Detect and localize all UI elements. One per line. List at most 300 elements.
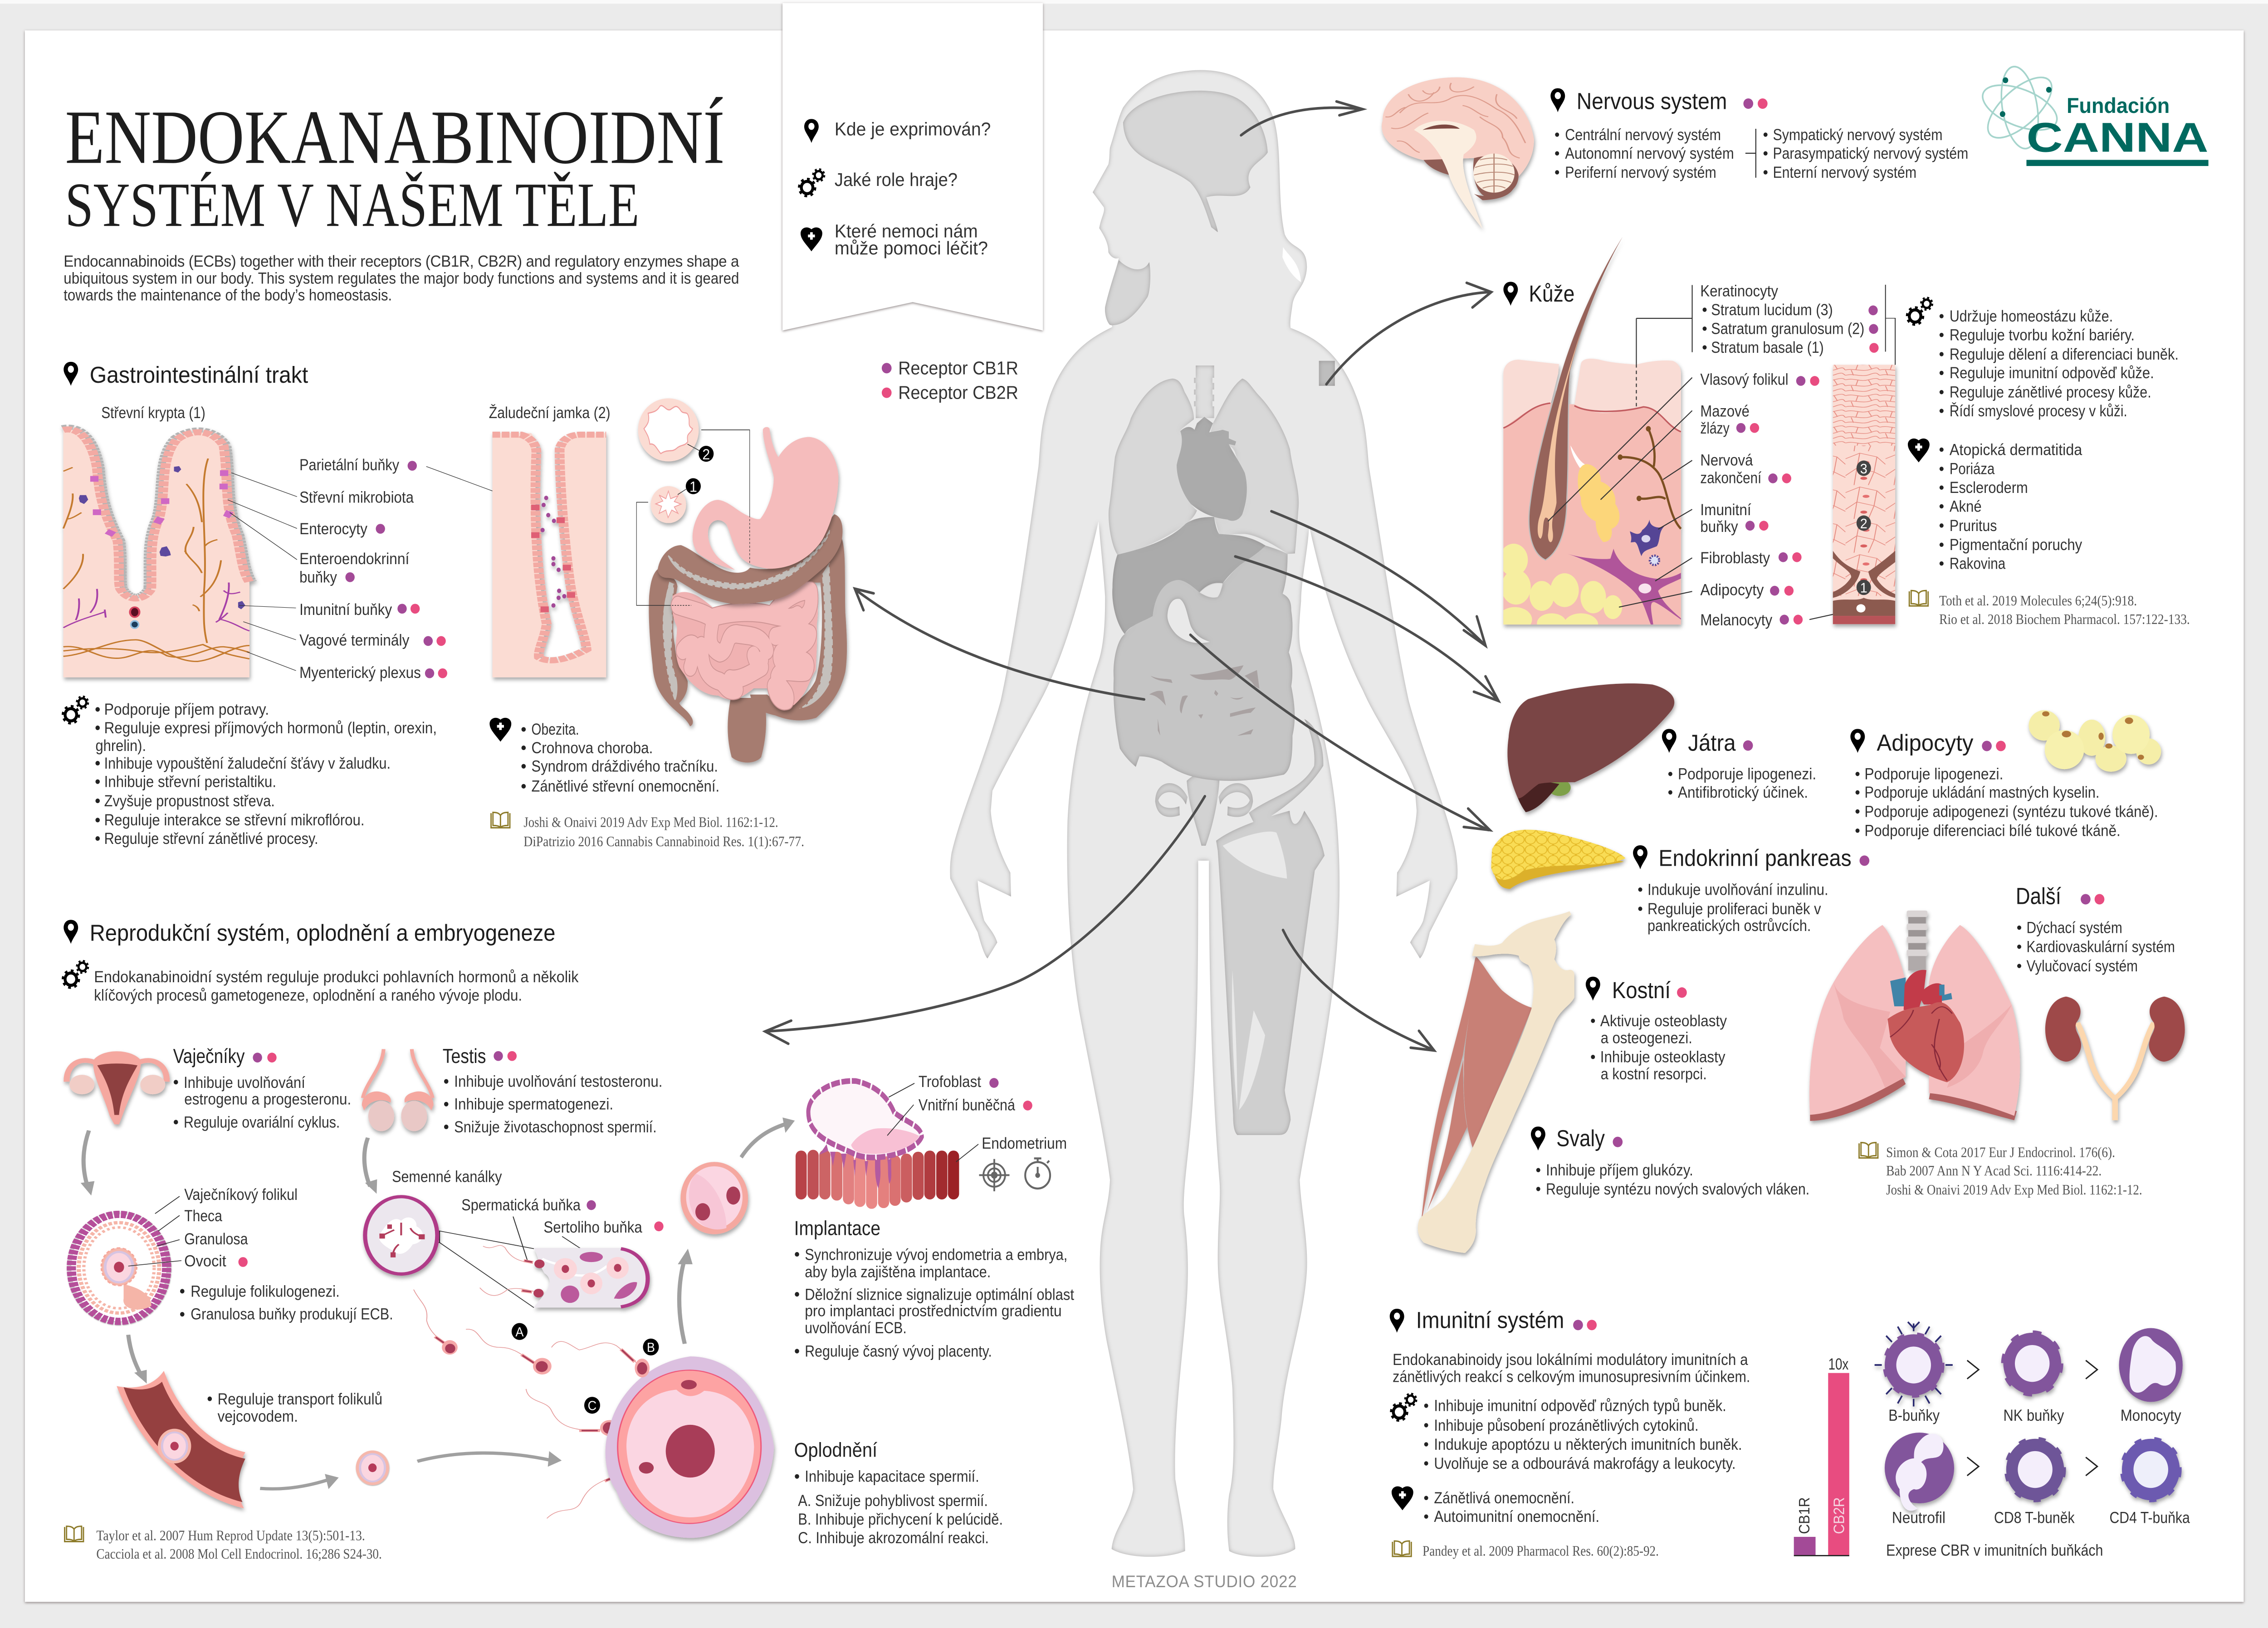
list: skin functions: Reguluje tvorbu kožní bariéry.: [1950, 327, 2135, 344]
legend: receptors: Receptor CB1R: [898, 358, 1018, 379]
organ: skin square: [1319, 361, 1335, 386]
arrows: gray process flow: [81, 1131, 693, 1489]
organ: pelvis and femur: [1216, 811, 1325, 1135]
arrows: body organs to panels: [765, 102, 1499, 1051]
icon: location pin: [804, 119, 819, 143]
main title: SYSTÉM V NAŠEM TĚLE: [65, 171, 639, 240]
list: immune functions: [1424, 1397, 1742, 1472]
panel: adipocytes: [1850, 710, 2161, 840]
implantation text: Reguluje časný vývoj placenty.: [805, 1342, 992, 1360]
icon: pin: [64, 920, 78, 944]
logo atom: [1977, 63, 2063, 151]
testes text: [443, 1045, 662, 1136]
list: GI diseases: Syndrom dráždivého tračníku.: [532, 758, 718, 775]
heading: Reprodukční systém, oplodnění a embryogeneze: [90, 920, 555, 946]
list: bone: Inhibuje osteoklasty: [1600, 1048, 1725, 1066]
organ: ovary tubes: [1157, 788, 1251, 813]
references: GI: Joshi & Onaivi 2019 Adv Exp Med Biol. 1162:1-12.: [523, 814, 778, 830]
organ: right lung: [1211, 379, 1299, 554]
list: liver: Podporuje lipogenezi.: [1678, 765, 1816, 783]
list: nervous systems: [1555, 126, 1968, 181]
heading: bone: Kostní: [1612, 978, 1671, 1003]
follicle labels: Reguluje folikulogenezi.: [191, 1283, 340, 1301]
crypt labels: [299, 456, 447, 682]
follicle labels: Vaječníkový folikul: [184, 1186, 298, 1204]
label: seminiferous tubules: Semenné kanálky: [392, 1168, 502, 1186]
bar chart: CB1R vs CB2R: CB1R: [1796, 1497, 1813, 1534]
illustration: small intestine: [672, 582, 818, 707]
arrow: to liver: [1271, 511, 1486, 646]
panel: endocrine pancreas: [1491, 830, 1869, 935]
cell labels: NK buňky: [2003, 1407, 2064, 1424]
intro paragraph: towards the maintenance of the body’s homeostasis.: [64, 287, 392, 304]
skin labels: Stratum basale (1): [1711, 339, 1824, 356]
list: GI functions: Podporuje příjem potravy.: [104, 701, 269, 718]
crypt labels: buňky: [299, 569, 337, 586]
cell labels: Neutrofil: [1892, 1509, 1945, 1527]
gears icon: GI roles: [63, 697, 88, 723]
intro paragraph: [64, 253, 739, 304]
ovaries text: Vaječníky: [173, 1045, 245, 1067]
arrow: to pancreas: [1190, 635, 1490, 830]
list: GI diseases: [522, 721, 719, 795]
leader lines: follicle: [128, 1196, 591, 1308]
skin labels: žlázy: [1700, 419, 1730, 437]
book icon: GI references: [491, 812, 510, 828]
list: skin functions: [1940, 307, 2179, 420]
human body silhouette: [950, 70, 1457, 1591]
list: GI functions: Inhibuje vypouštění žaludeční šťávy v žaludku.: [104, 755, 391, 772]
fertilisation text: A. Snižuje pohyblivost spermií.: [798, 1492, 988, 1510]
illustration: gastric pit: [493, 433, 606, 678]
icon: pin: [1390, 1309, 1404, 1333]
heading: Kůže: [1529, 281, 1574, 307]
heading: Gastrointestinální trakt: [90, 362, 308, 388]
logo: Fundación CANNA: [1977, 63, 2209, 166]
list: pancreas: Reguluje proliferaci buněk v: [1647, 900, 1821, 918]
ovaries text: Inhibuje uvolňování: [184, 1074, 305, 1092]
heading: Nervous system: [1577, 88, 1727, 114]
bar chart: CB1R vs CB2R: CB2R: [1831, 1497, 1848, 1534]
list: skin diseases: Rakovina: [1950, 555, 2006, 573]
illustration: fallopian tube: [117, 1371, 245, 1508]
intro text: [94, 968, 579, 1004]
intro text: zánětlivých reakcí s celkovým imunosupresivním účinkem.: [1393, 1368, 1750, 1386]
organ: uterus: [1187, 773, 1219, 846]
testes text: Inhibuje uvolňování testosteronu.: [454, 1073, 662, 1091]
list: skin diseases: Escleroderm: [1950, 479, 2028, 497]
list: nervous systems: Centrální nervový systém: [1565, 126, 1721, 144]
organ detail: gallbladder gap: [1199, 583, 1223, 598]
arrow: to reproductive: [765, 796, 1205, 1044]
list: bone: a osteogenezi.: [1601, 1029, 1692, 1047]
panel: liver: [1507, 683, 1816, 812]
references: GI: DiPatrizio 2016 Cannabis Cannabinoid Res. 1(1):67-77.: [523, 833, 804, 849]
organ: trachea: [1194, 366, 1214, 418]
organs: head and pelvis: [1105, 91, 1325, 1135]
implantation text: Synchronizuje vývoj endometria a embrya,: [805, 1246, 1067, 1264]
list: GI functions: Zvyšuje propustnost střeva.: [104, 792, 275, 810]
list: nervous systems: Enterní nervový systém: [1773, 164, 1916, 181]
arrow: to skin: [1326, 283, 1491, 384]
skin labels: Mazové: [1700, 403, 1750, 420]
question: which diseases: může pomoci léčit?: [835, 238, 988, 258]
icon: gears: [1391, 1394, 1416, 1420]
illustration: fat cells: [2028, 710, 2161, 772]
body cut-outs: [1222, 247, 1301, 1110]
list: adipocytes: Podporuje adipogenezi (syntézu tukové tkáně).: [1864, 803, 2158, 821]
badges: stratum layers: 2: [1860, 516, 1867, 531]
label: gastric pit: Žaludeční jamka (2): [489, 404, 611, 422]
references: reproductive: Taylor et al. 2007 Hum Reprod Update 13(5):501-13.: [96, 1528, 365, 1544]
panel: skin: [1498, 237, 2190, 636]
illustration: sertoli cell detail: [533, 1248, 650, 1308]
list: GI functions: Reguluje střevní zánětlivé procesy.: [104, 830, 318, 848]
badges: stratum layers: 3: [1860, 461, 1867, 477]
list: adipocytes: [1856, 765, 2158, 840]
list: immune functions: Inhibuje imunitní odpověď různých typů buněk.: [1434, 1397, 1726, 1415]
receptor dot: [1743, 740, 1753, 751]
list: liver: [1668, 765, 1816, 801]
testes text: Inhibuje spermatogenezi.: [454, 1096, 613, 1113]
list: skin functions: Reguluje zánětlivé procesy kůže.: [1950, 384, 2151, 401]
references: reproductive: [96, 1528, 382, 1562]
list: bone: Aktivuje osteoblasty: [1600, 1012, 1727, 1030]
illustration: implantation: [796, 1081, 959, 1209]
ovaries text: Reguluje ovariální cyklus.: [184, 1113, 340, 1131]
panel: other systems: [1809, 883, 2185, 1198]
list: GI functions: ghrelin).: [95, 737, 146, 755]
list: nervous systems: Sympatický nervový systém: [1773, 126, 1943, 144]
testes text: Snižuje životaschopnost spermií.: [454, 1118, 657, 1136]
implantation text: aby byla zajištěna implantace.: [805, 1263, 991, 1281]
legend: receptors: Receptor CB2R: [898, 383, 1018, 403]
bar chart: CB1R vs CB2R: [1794, 1355, 1849, 1555]
list: skin diseases: Pigmentační poruchy: [1950, 536, 2082, 554]
illustration: ovarian follicle: [71, 1214, 166, 1321]
illustration: brain: [1382, 77, 1534, 229]
fertilisation text: Oplodnění: [794, 1439, 877, 1462]
list: skin diseases: Atopická dermatitida: [1950, 441, 2082, 459]
intro text: Endokanabinoidní systém reguluje produkci pohlavních hormonů a několik: [94, 968, 579, 986]
cell: B cell: [1875, 1322, 1953, 1407]
legend: receptors: [882, 358, 1018, 403]
implantation text: Děložní sliznice signalizuje optimální oblast: [805, 1286, 1074, 1304]
references: other: Joshi & Onaivi 2019 Adv Exp Med Biol. 1162:1-12.: [1886, 1182, 2142, 1198]
receptor dot: bone: [1677, 987, 1687, 998]
chart caption: Exprese CBR v imunitních buňkách: [1886, 1541, 2103, 1560]
book icon: reproductive references: [65, 1526, 83, 1542]
crypt labels: Enteroendokrinní: [299, 550, 410, 568]
cell labels: Monocyty: [2121, 1407, 2181, 1424]
follicle labels: Theca: [184, 1207, 223, 1225]
receptor dots: [1982, 741, 2006, 751]
icon: gears: [1907, 298, 1932, 325]
illustration: pancreas: [1491, 830, 1626, 889]
ribbon: key questions: [782, 3, 1043, 331]
illustration: two-cell embryo: [680, 1162, 748, 1234]
arrow: embryo to implantation: [741, 1117, 795, 1157]
organ: throat gland: [1105, 260, 1150, 325]
list: muscle: [1536, 1161, 1809, 1198]
illustration: epidermis strip: [1833, 365, 1895, 624]
illustration: transverse colon: [658, 515, 842, 603]
intro paragraph: ubiquitous system in our body. This system regulates the major body functions and systems and it is geared: [64, 269, 739, 288]
heading: Imunitní systém: [1416, 1307, 1564, 1333]
implantation labels: [919, 1073, 1067, 1152]
illustration: thigh muscles: [1422, 957, 1532, 1218]
fertilisation text: C. Inhibuje akrozomální reakci.: [798, 1529, 989, 1547]
references: reproductive: Cacciola et al. 2008 Mol Cell Endocrinol. 16;286 S24-30.: [96, 1546, 382, 1562]
list: GI diseases: Crohnova choroba.: [532, 739, 653, 757]
crypt labels: Střevní mikrobiota: [299, 489, 414, 507]
icon: book: [1909, 590, 1928, 606]
organs: torso: [1109, 361, 1335, 781]
list: GI diseases: Zánětlivé střevní onemocnění.: [532, 778, 719, 795]
transport text: [208, 1390, 382, 1425]
icon: book: [1859, 1143, 1878, 1158]
list: nervous systems: Autonomní nervový systém: [1565, 145, 1734, 162]
list: liver: Antifibrotický účinek.: [1678, 784, 1808, 801]
icon: heart: [1908, 439, 1930, 463]
leader lines: crypt and pit: [228, 467, 534, 671]
list: GI functions: Reguluje interakce se střevní mikroflórou.: [104, 811, 365, 829]
testes text: Testis: [443, 1045, 486, 1067]
ovaries text: estrogenu a progesteronu.: [184, 1091, 351, 1108]
organ: left lung: [1109, 379, 1197, 555]
cell: CD8 T cell: [2006, 1438, 2064, 1501]
skin labels: [1700, 283, 1879, 629]
list: immune diseases: Autoimunitní onemocnění.: [1434, 1508, 1599, 1526]
list: adipocytes: Podporuje diferenciaci bílé tukové tkáně.: [1864, 822, 2121, 840]
list: adipocytes: Podporuje ukládání mastných kyselin.: [1864, 784, 2100, 801]
panel: nervous system: [1382, 77, 1968, 229]
heading: Další: [2016, 883, 2061, 909]
references: other: [1886, 1145, 2142, 1198]
list: immune functions: Uvolňuje se a odbourává makrofágy a leukocyty.: [1434, 1455, 1736, 1472]
cell labels: CD8 T-buněk: [1994, 1509, 2075, 1527]
icon: book: [1393, 1541, 1411, 1556]
list: immune diseases: Zánětlivá onemocnění.: [1434, 1489, 1574, 1507]
illustration: skin section: [1498, 237, 1681, 636]
icon: pin muscle: [1531, 1126, 1545, 1150]
icon: gears: [63, 961, 88, 988]
list: other systems: Kardiovaskulární systém: [2026, 938, 2175, 956]
main title: ENDOKANABINOIDNÍ: [65, 94, 725, 180]
bracket: right of keratinocytes: [1886, 285, 1895, 365]
implantation text: uvolňování ECB.: [805, 1319, 907, 1337]
list: immune diseases: [1424, 1489, 1599, 1526]
list: bone: a kostní resorpci.: [1601, 1065, 1707, 1083]
illustration: lungs and heart: [1809, 911, 2020, 1121]
crypt labels: Parietální buňky: [299, 456, 400, 474]
cell: CD4 T cell: [2121, 1438, 2180, 1501]
label: intestinal crypt: Střevní krypta (1): [101, 404, 205, 422]
crypt labels: Imunitní buňky: [299, 601, 392, 619]
badges: 1 and 2: 2: [702, 446, 710, 463]
transport text: vejcovodem.: [218, 1408, 298, 1425]
heading: muscle: Svaly: [1556, 1126, 1605, 1151]
implantation text: pro implantaci prostřednictvím gradientu: [805, 1302, 1062, 1320]
icon: pin: [64, 362, 78, 386]
intro text: [1393, 1351, 1750, 1386]
organ: stomach and intestines: [1114, 546, 1295, 781]
follicle labels: [180, 1186, 393, 1323]
organ: heart: [1177, 417, 1247, 521]
sperm cell labels: Sertoliho buňka: [543, 1219, 643, 1236]
question: where expressed: Kde je exprimován?: [835, 119, 991, 140]
ovaries text: [173, 1045, 351, 1131]
list: other systems: Vylučovací systém: [2026, 957, 2138, 975]
credit: Metazoa studio: METAZOA STUDIO 2022: [1112, 1572, 1297, 1591]
skin labels: Melanocyty: [1700, 611, 1773, 629]
implantation text: [794, 1217, 1074, 1360]
references: other: Simon & Cota 2017 Eur J Endocrinol. 176(6).: [1886, 1145, 2115, 1160]
implantation labels: Endometrium: [982, 1135, 1067, 1152]
organ: hip band: [1249, 719, 1323, 826]
icon: stopwatch: [1025, 1158, 1050, 1189]
organ: brain: [1123, 91, 1268, 232]
letter badges: B: [647, 1340, 655, 1355]
panel: reproductive system: [63, 920, 1074, 1562]
crypt labels: Myenterický plexus: [299, 664, 421, 682]
intro paragraph: Endocannabinoids (ECBs) together with their receptors (CB1R, CB2R) and regulatory enzymes shape a: [64, 253, 739, 270]
fertilisation text: B. Inhibuje přichycení k pelúcidě.: [798, 1511, 1003, 1528]
badges: stratum layers: 1: [1860, 580, 1867, 596]
leader lines: stomach brackets: [636, 430, 750, 605]
illustration: uterus and ovaries: [67, 1051, 166, 1124]
icon: pin bone: [1586, 977, 1600, 1001]
skin labels: Satratum granulosum (2): [1711, 320, 1864, 338]
references: skin: Rio et al. 2018 Biochem Pharmacol. 157:122-133.: [1939, 611, 2190, 627]
heading: Játra: [1688, 730, 1736, 756]
icon: pin: [1850, 729, 1865, 753]
list: nervous systems: Parasympatický nervový systém: [1773, 145, 1968, 162]
sperm cell labels: [461, 1196, 664, 1236]
heart icon: GI diseases: [489, 718, 511, 742]
icon: pin: [1633, 845, 1647, 869]
illustration: released follicle: [356, 1450, 389, 1485]
arrow: to brain: [1241, 102, 1363, 135]
heading: Endokrinní pankreas: [1659, 845, 1852, 871]
references: GI: [523, 814, 804, 849]
illustration: testes: [362, 1049, 434, 1131]
follicle labels: Ovocit: [184, 1253, 226, 1270]
letter badges: C: [588, 1399, 596, 1413]
illustration: cross-section 1: [650, 486, 686, 523]
cell labels: [1888, 1407, 2190, 1527]
implantation text: Implantace: [794, 1217, 880, 1240]
list: adipocytes: Podporuje lipogenezi.: [1864, 765, 2003, 783]
list: pancreas: [1638, 881, 1828, 935]
cell: neutrophil: [1885, 1433, 1954, 1511]
icon: target: [979, 1159, 1009, 1191]
list: pancreas: pankreatických ostrůvcích.: [1647, 917, 1811, 935]
receptor dot: [1859, 855, 1869, 866]
cell labels: CD4 T-buňka: [2110, 1509, 2190, 1527]
logo wordmark large: CANNA: [2026, 114, 2209, 161]
list: immune functions: Indukuje apoptózu u některých imunitních buněk.: [1434, 1436, 1742, 1453]
arrow: to bone and muscle: [1283, 930, 1434, 1051]
list: nervous systems: Periferní nervový systém: [1565, 164, 1716, 181]
skin labels: Nervová: [1700, 451, 1753, 469]
list: skin functions: Reguluje imunitní odpověď kůže.: [1950, 364, 2154, 382]
cell labels: B-buňky: [1888, 1407, 1940, 1424]
implantation labels: Trofoblast: [919, 1073, 981, 1091]
illustration: intestinal crypt: [64, 429, 249, 678]
atom dots: [2000, 78, 2052, 117]
icon: pin: [1662, 729, 1677, 753]
receptor dot: muscle: [1613, 1137, 1623, 1147]
logo underline: [2026, 160, 2209, 166]
skin labels: Stratum lucidum (3): [1711, 301, 1833, 319]
fertilisation text: [794, 1439, 1003, 1547]
transport text: Reguluje transport folikulů: [218, 1390, 382, 1408]
question: which diseases: Které nemoci nám: [835, 221, 978, 242]
letter badges: A: [515, 1325, 524, 1339]
sperm cell labels: Spermatická buňka: [461, 1196, 581, 1214]
list: muscle: Inhibuje příjem glukózy.: [1546, 1161, 1693, 1179]
list: skin functions: Udržuje homeostázu kůže.: [1950, 307, 2113, 325]
illustration: sperm cells: [414, 1245, 637, 1518]
illustration: colon sides and rectum: [650, 539, 846, 762]
follicle labels: Granulosa buňky produkují ECB.: [191, 1306, 393, 1323]
icon: pin: [1550, 88, 1565, 112]
skin labels: Adipocyty: [1700, 581, 1764, 599]
organ detail: intestinal gaps: [1149, 665, 1259, 736]
skin labels: Keratinocyty: [1700, 283, 1779, 300]
crypt labels: Enterocyty: [299, 520, 368, 538]
badges: 1 and 2: 1: [689, 479, 697, 495]
list: muscle: Reguluje syntézu nových svalových vláken.: [1546, 1180, 1809, 1198]
question: what role: Jaké role hraje?: [835, 170, 958, 190]
icon: heart: [1392, 1487, 1413, 1510]
list: other systems: [2017, 919, 2175, 975]
list: immune functions: Inhibuje působení prozánětlivých cytokinů.: [1434, 1417, 1699, 1434]
organ: liver: [1112, 517, 1266, 634]
cell: monocyte: [2119, 1328, 2183, 1402]
receptor dots: [2081, 894, 2104, 904]
list: GI diseases: Obezita.: [532, 721, 579, 739]
illustration: seminiferous tubule: [365, 1197, 437, 1274]
cell: NK cell: [2003, 1332, 2062, 1394]
illustration: stomach: [693, 427, 838, 570]
immune cell hierarchy: [1875, 1322, 2190, 1560]
list: GI functions: Reguluje expresi příjmových hormonů (leptin, orexin,: [104, 719, 437, 737]
references: other: Bab 2007 Ann N Y Acad Sci. 1116:414-22.: [1886, 1163, 2102, 1179]
badges: 1 and 2: [686, 446, 714, 495]
badges: stratum layers: [1857, 461, 1871, 596]
reference: immune: Pandey et al. 2009 Pharmacol Res. 60(2):85-92.: [1422, 1543, 1659, 1559]
crypt labels: Vagové terminály: [299, 632, 410, 649]
follicle labels: Granulosa: [184, 1230, 248, 1248]
receptor dots: [1573, 1320, 1597, 1330]
intro text: Endokanabinoidy jsou lokálními modulátory imunitních a: [1393, 1351, 1749, 1369]
letter badges: [512, 1323, 659, 1414]
panel: bone and muscle: [1418, 911, 1809, 1253]
references: skin: [1939, 593, 2190, 627]
panel: gastrointestinal tract: [63, 362, 846, 849]
skin labels: Vlasový folikul: [1700, 371, 1789, 389]
heading: Adipocyty: [1877, 730, 1974, 756]
panel: immune system: [1390, 1307, 2190, 1560]
illustration: fertilised egg: [606, 1356, 774, 1538]
list: GI functions: Inhibuje střevní peristaltiku.: [104, 773, 276, 791]
references: skin: Toth et al. 2019 Molecules 6;24(5):918.: [1939, 593, 2137, 609]
list: GI functions: [95, 701, 437, 848]
bar chart: CB1R vs CB2R: 10x: [1828, 1355, 1848, 1373]
list: skin diseases: [1940, 441, 2082, 573]
